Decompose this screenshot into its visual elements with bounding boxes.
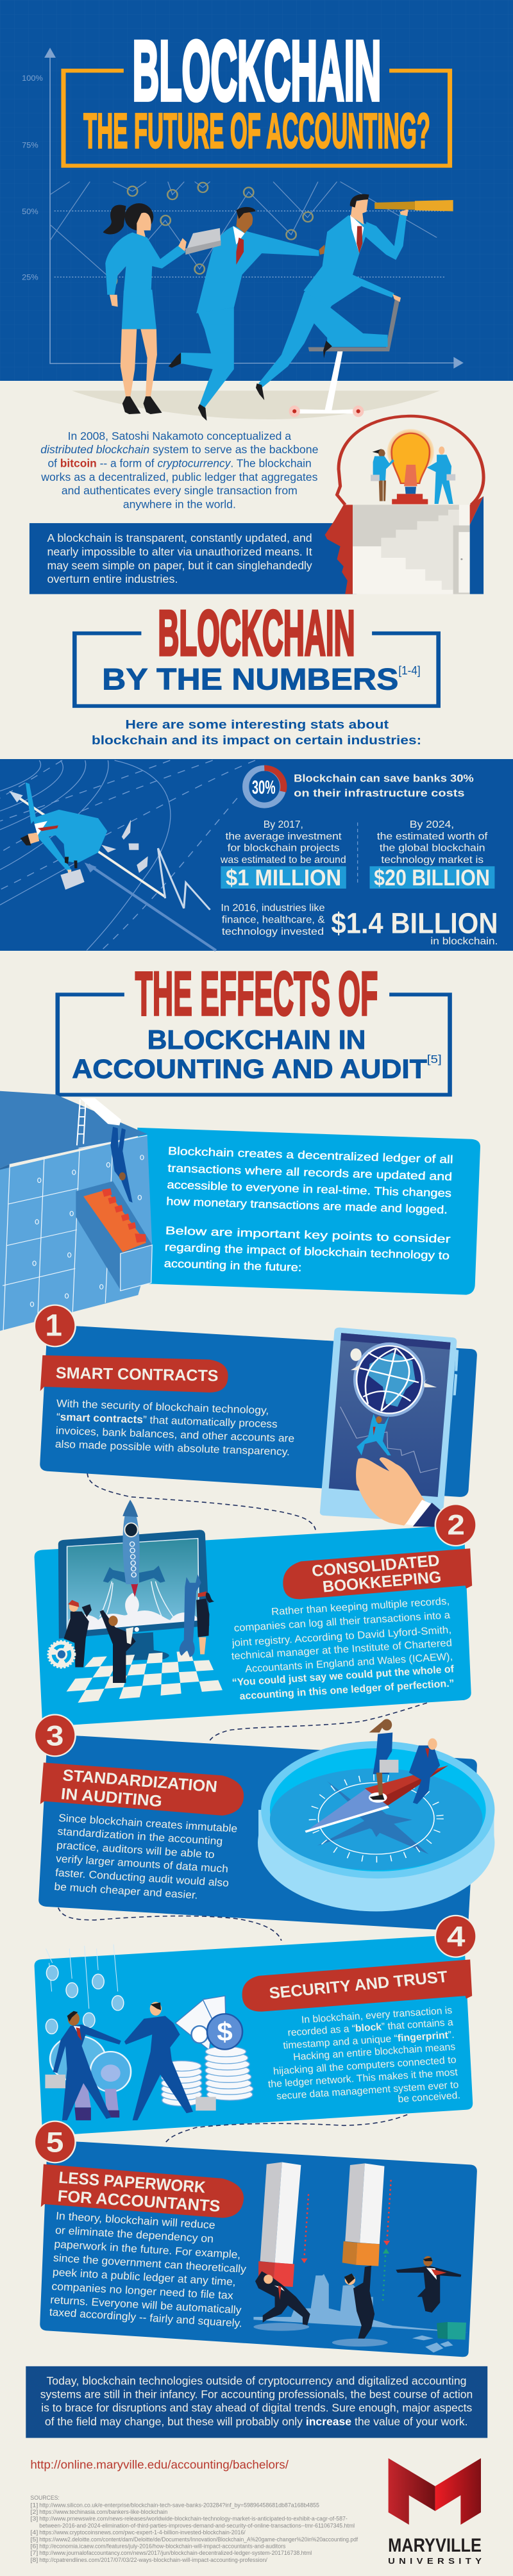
divider xyxy=(357,823,358,885)
ribbon xyxy=(242,1959,472,2012)
sources list: between-2016-and-2024-elimination-of-third-parties-improves-demand-and-security-of-online-transactions--tmr-611067345.html xyxy=(39,2523,355,2529)
maryville university logo: MARYVILLE xyxy=(388,2534,482,2555)
maryville university logo: UNIVERSITY xyxy=(388,2556,482,2566)
city skyline xyxy=(253,2274,469,2332)
panel text: how monetary transactions are made and logged. xyxy=(166,1195,448,1216)
card text xyxy=(49,2210,248,2329)
maryville university logo xyxy=(388,2458,482,2566)
hero section xyxy=(22,24,462,421)
chart percent labels xyxy=(22,74,43,281)
sources list: https://www2.deloitte.com/content/dam/Deloitte/de/Documents/Innovation/Blockchain_A%20game-changer%20in%20accounting.pdf xyxy=(39,2536,358,2543)
heading: by the numbers: BY THE NUMBERS xyxy=(102,662,398,696)
stat: 20 billion: the global blockchain xyxy=(380,842,485,853)
intro paragraph: distributed blockchain system to serve as the backbone xyxy=(40,443,318,456)
card text: returns. Everyone will be automatically xyxy=(50,2294,242,2316)
card text: hijacking all the computers connected to xyxy=(273,2054,457,2077)
card background xyxy=(35,1934,473,2136)
card text: timestamp and a unique “fingerprint”. xyxy=(283,2029,455,2051)
intro paragraph: works as a decentralized, public ledger that aggregates xyxy=(40,471,317,483)
stat: 30 percent donut xyxy=(246,768,283,805)
stats band xyxy=(0,760,498,950)
sources list: [5] xyxy=(30,2536,38,2543)
ribbon title: BOOKKEEPING xyxy=(322,1568,442,1596)
ribbon title: STANDARDIZATION xyxy=(62,1766,218,1796)
intro paragraph xyxy=(40,430,318,510)
numbers subheading: Here are some interesting stats about xyxy=(125,718,389,732)
card text: With the security of blockchain technology, xyxy=(56,1397,269,1416)
card text: faster. Conducting audit would also xyxy=(55,1866,230,1889)
card text: companies no longer need to file tax xyxy=(51,2280,233,2302)
card text: Since blockchain creates immutable xyxy=(58,1812,238,1835)
chart percent labels: 100% xyxy=(22,74,43,83)
stat: bank savings: Blockchain can save banks 30% xyxy=(294,773,474,784)
chart zigzag lines xyxy=(50,181,437,280)
handshake illustration xyxy=(45,1945,253,2120)
callout text: A blockchain is transparent, constantly updated, and xyxy=(47,531,312,544)
numbers subheading: blockchain and its impact on certain industries: xyxy=(92,733,421,748)
website url: http://online.maryville.edu/accounting/bachelors/ xyxy=(30,2459,289,2471)
ribbon title: CONSOLIDATED xyxy=(311,1551,441,1580)
card text: technical manager at the Institute of Chartered xyxy=(231,1637,453,1662)
conclusion text: Today, blockchain technologies outside of cryptocurrency and digitalized accounting xyxy=(46,2375,467,2387)
connector dashed line xyxy=(87,1473,315,1532)
sources list: https://www.techinasia.com/bankers-like-blockchain xyxy=(39,2509,167,2516)
handshake illustration: $ xyxy=(217,2018,233,2046)
ribbon title xyxy=(57,2168,221,2215)
sources list: SOURCES: xyxy=(30,2495,60,2502)
sources list: [7] xyxy=(30,2550,38,2557)
sources list xyxy=(30,2495,358,2564)
filing cabinet illustration xyxy=(0,1091,152,1331)
chart percent labels: 75% xyxy=(22,140,38,149)
stat: 1.4 billion xyxy=(221,901,498,947)
number badge 2: 2 xyxy=(447,1509,465,1541)
card text: secure data management system ever to xyxy=(276,2079,459,2102)
panel text: accessible to everyone in real-time. This changes xyxy=(167,1178,451,1200)
callout text: overturn entire industries. xyxy=(47,573,178,585)
conclusion text: of the field may change, but these will probably only increase the value of your work. xyxy=(45,2415,468,2428)
sources list: http://www.silicon.co.uk/e-enterprise/blockchain-tech-save-banks-203284?inf_by=59896458681db87a168b4855 xyxy=(39,2502,319,2509)
number badge 5: 5 xyxy=(46,2127,63,2159)
panel text: accounting in the future: xyxy=(164,1257,302,1274)
number badge 2 xyxy=(435,1503,477,1546)
stat: 1 million: for blockchain projects xyxy=(228,842,340,853)
card text: “You could just say we could put the whole of xyxy=(231,1662,455,1688)
card background xyxy=(40,1325,477,1497)
icon: phone with globe xyxy=(320,1328,458,1527)
number badge 4: 4 xyxy=(447,1921,466,1953)
ribbon title: SECURITY AND TRUST xyxy=(268,1968,449,2002)
card text: paperwork in the future. For example, xyxy=(54,2238,241,2261)
card text: practice, auditors will be able to xyxy=(56,1839,215,1861)
conclusion text xyxy=(40,2375,473,2428)
chart percent labels: 25% xyxy=(22,272,38,281)
card text: In blockchain, every transaction is xyxy=(301,2004,453,2025)
card text: Accountants in England and Wales (ICAEW), xyxy=(244,1650,453,1675)
callout text: may seem simple on paper, but it can singlehandedly xyxy=(47,559,312,572)
card text: standardization in the accounting xyxy=(57,1825,223,1847)
card text: peek into a public ledger at any time, xyxy=(52,2266,236,2288)
flying papers and briefcase xyxy=(60,819,148,890)
ribbon title xyxy=(60,1766,218,1811)
card text: companies can log all their transactions into a xyxy=(233,1609,451,1634)
title frame xyxy=(63,71,450,165)
card background xyxy=(38,1734,477,1932)
ribbon xyxy=(41,2164,244,2218)
stat: 20 billion: By 2024, xyxy=(410,818,454,830)
sources list: http://economia.icaew.com/features/july-2016/how-blockchain-will-impact-accountants-and-auditors xyxy=(39,2543,285,2550)
connector dashed line xyxy=(58,1908,282,1941)
man with telescope xyxy=(256,194,453,400)
effects section xyxy=(0,958,480,1331)
card 2: consolidated bookkeeping xyxy=(35,1500,477,1741)
stats band background xyxy=(0,759,513,951)
card text: since the government can theoretically xyxy=(53,2252,248,2275)
falling businessman xyxy=(21,782,107,873)
heading: accounting and audit: ACCOUNTING AND AUDIT xyxy=(72,1053,427,1084)
card text xyxy=(231,1594,455,1702)
effects heading frame xyxy=(58,994,450,1095)
falling arrow and zigzag xyxy=(9,791,216,950)
card text xyxy=(267,2004,460,2105)
ribbon xyxy=(283,1548,472,1599)
stat: 1.4 billion: technology invested xyxy=(222,925,324,937)
stat: 30 percent donut: 30% xyxy=(252,776,276,798)
ribbon title: IN AUDITING xyxy=(60,1785,163,1811)
stat: bank savings xyxy=(294,773,474,799)
stat: bank savings: on their infrastructure costs xyxy=(294,787,464,799)
numbers heading frame xyxy=(74,633,439,706)
chart dotted gridlines xyxy=(55,211,446,277)
intro section xyxy=(29,416,484,748)
stat: 1 million: the average investment xyxy=(226,830,342,842)
intro paragraph: anywhere in the world. xyxy=(123,498,236,510)
card text: “smart contracts” that automatically process xyxy=(56,1410,278,1430)
sources list: http://cpatrendlines.com/2017/07/03/22-ways-blockchain-will-impact-accounting-profession/ xyxy=(39,2557,267,2564)
card text: be conceived. xyxy=(398,2089,460,2105)
card text: also made possible with absolute transparency. xyxy=(55,1438,290,1458)
stat: 1 million: was estimated to be around xyxy=(220,853,346,866)
citation: [1-4] xyxy=(398,664,421,678)
card text: invoices, bank balances, and other accounts are xyxy=(56,1425,295,1444)
number badge 4 xyxy=(435,1915,477,1958)
sources list: http://www.prnewswire.com/news-releases/worldwide-blockchain-technology-market-is-anticipated-to-exhibit-a-cagr-of-587- xyxy=(39,2516,348,2522)
card 5: less paperwork xyxy=(26,2121,487,2566)
ribbon title: LESS PAPERWORK xyxy=(58,2168,206,2196)
hero background xyxy=(0,0,513,381)
intro paragraph: of bitcoin -- a form of cryptocurrency. The blockchain xyxy=(47,457,312,469)
stat: 1.4 billion: finance, healthcare, & xyxy=(222,914,325,925)
stat: 1 million: $1 MILLION xyxy=(226,865,341,891)
card text: Hacking an entire blockchain means xyxy=(292,2041,456,2062)
card text: accounting in this one ledger of perfection.” xyxy=(239,1677,455,1702)
card text: taxed accordingly -- fairly and squarely. xyxy=(49,2306,243,2329)
card text: or eliminate the dependency on xyxy=(55,2224,214,2245)
card text: recorded as a “block” that contains a xyxy=(287,2016,454,2038)
sources list: [6] xyxy=(30,2543,38,2550)
card text xyxy=(55,1397,295,1458)
intro paragraph: and authenticates every single transaction from xyxy=(62,484,298,497)
card background xyxy=(35,1525,471,1727)
panel text: regarding the impact of blockchain technology to xyxy=(164,1241,450,1262)
numbers subheading xyxy=(92,718,421,748)
heading: blockchain in: BLOCKCHAIN IN xyxy=(147,1025,366,1055)
panel: intro ledger xyxy=(137,1128,480,1295)
connector dashed line xyxy=(165,2114,407,2144)
panel text: Blockchain creates a decentralized ledger of all xyxy=(168,1144,453,1166)
card 3: standardization in auditing xyxy=(34,1714,494,1941)
sources list: [1] xyxy=(30,2502,38,2509)
card background xyxy=(40,2140,477,2357)
running track curves xyxy=(0,760,255,950)
chart data points xyxy=(109,183,313,285)
sources list: [2] xyxy=(30,2509,38,2516)
chair xyxy=(289,299,399,417)
stat: 20 billion: technology market is xyxy=(381,853,484,866)
woman figure xyxy=(103,203,187,414)
card 4: security and trust xyxy=(35,1915,477,2144)
man with briefcase xyxy=(169,207,326,421)
number badge 1 xyxy=(34,1304,76,1347)
connector dashed line xyxy=(210,1703,427,1741)
ribbon title xyxy=(311,1551,442,1596)
card text: be much cheaper and easier. xyxy=(54,1880,198,1901)
icon: head with lightbulb xyxy=(325,416,484,594)
sources list: [8] xyxy=(30,2557,38,2564)
sources list: https://www.cryptocoinsnews.com/pwc-expert-1-4-billion-invested-blockchain-2016/ xyxy=(39,2530,246,2536)
panel text: Below are important key points to consider xyxy=(165,1224,451,1245)
card text: the ledger network. This makes it the most xyxy=(267,2066,458,2090)
card text: In theory, blockchain will reduce xyxy=(55,2210,215,2231)
rocket launch illustration xyxy=(49,1500,223,1703)
stat: 20 billion xyxy=(370,818,494,891)
stat: 20 billion: the estimated worth of xyxy=(377,830,487,842)
conclusion box xyxy=(26,2366,487,2438)
stat: 1 million: By 2017, xyxy=(264,818,303,830)
stat: 1.4 billion: in blockchain. xyxy=(430,935,498,947)
chart percent labels: 50% xyxy=(22,207,38,216)
panel text: transactions where all records are updated and xyxy=(167,1162,452,1183)
ribbon xyxy=(40,1762,244,1816)
intro paragraph: In 2008, Satoshi Nakamoto conceptualized a xyxy=(68,430,292,442)
callout text: nearly impossible to alter via unauthorized means. It xyxy=(47,546,312,558)
card text: verify larger amounts of data much xyxy=(55,1852,229,1875)
stat: 1.4 billion: In 2016, industries like xyxy=(221,901,325,914)
number badge 3: 3 xyxy=(46,1720,63,1752)
panel text xyxy=(164,1144,453,1274)
paper stacks illustration xyxy=(253,2162,466,2352)
sources list: [4] xyxy=(30,2530,38,2536)
number badge 1: 1 xyxy=(45,1308,62,1342)
blue callout box xyxy=(29,523,357,594)
citation: [5] xyxy=(427,1053,442,1066)
floor shadow xyxy=(72,390,440,419)
sources list: [3] xyxy=(30,2516,38,2522)
callout text xyxy=(47,531,312,585)
card text xyxy=(54,1812,238,1901)
number badge 5 xyxy=(34,2121,76,2163)
card text: Rather than keeping multiple records, xyxy=(271,1594,450,1618)
ribbon xyxy=(40,1355,228,1393)
card 1: smart contracts xyxy=(34,1304,477,1532)
card text: joint registry. According to David Lyford-Smith, xyxy=(231,1623,452,1649)
ribbon title: FOR ACCOUNTANTS xyxy=(57,2186,221,2215)
chart axes xyxy=(45,49,462,368)
number badge 3 xyxy=(34,1714,76,1757)
sources list: http://www.journalofaccountancy.com/news/2017/jun/blockchain-decentralized-ledger-system-201716738.html xyxy=(39,2550,312,2557)
compass illustration xyxy=(258,1719,494,1911)
ribbon title: SMART CONTRACTS xyxy=(56,1364,219,1385)
stat: 1 million xyxy=(220,818,346,891)
